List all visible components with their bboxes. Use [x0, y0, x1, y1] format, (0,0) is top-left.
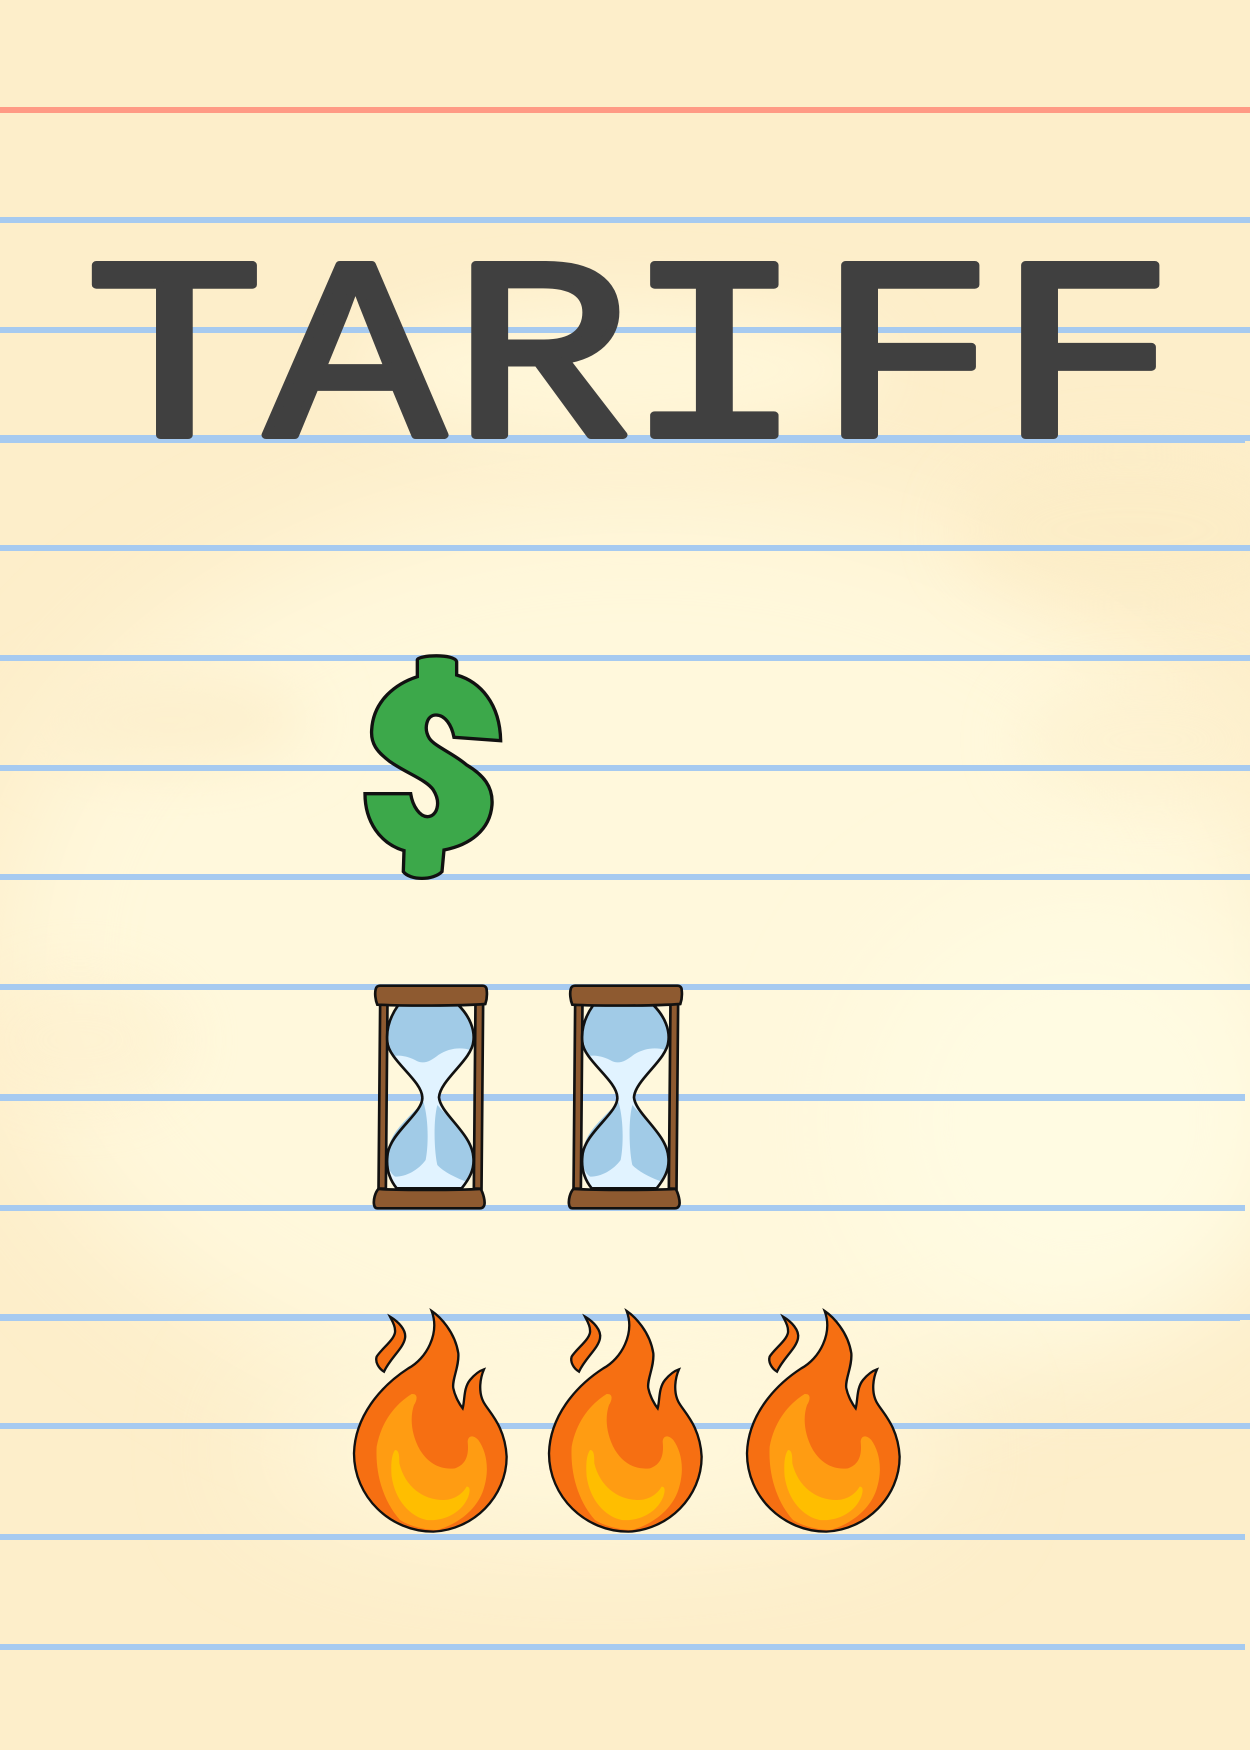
icon: hourglass 1: [374, 986, 487, 1208]
title: TARIFF: [85, 222, 1176, 513]
icon: flame 1: [354, 1311, 507, 1532]
icon: flame 2: [549, 1311, 702, 1532]
icon: dollar sign (cost rating): [365, 656, 501, 878]
icon: flame 3: [747, 1311, 900, 1532]
icon: hourglass 2: [569, 986, 682, 1208]
